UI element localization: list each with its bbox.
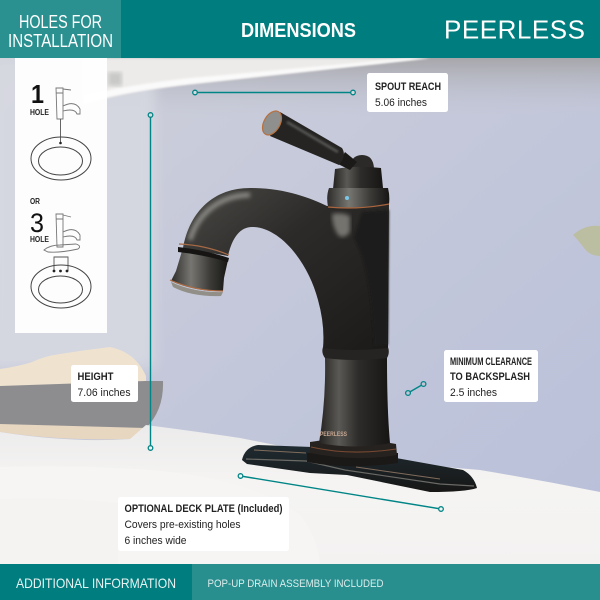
footer bar xyxy=(0,564,600,600)
icon: 3 hole count: OR xyxy=(30,197,40,206)
callout: minimum clearance xyxy=(444,350,538,402)
logo: Peerless: PEERLESS xyxy=(444,14,585,44)
header bar xyxy=(0,0,600,58)
icon: 1 hole faucet xyxy=(56,88,80,142)
callout: minimum clearance: 2.5 inches xyxy=(450,387,497,399)
icon: 3 hole sink xyxy=(31,265,91,308)
background: soap dish xyxy=(0,347,163,439)
background: counter top xyxy=(0,425,600,570)
icon: 3 hole count xyxy=(30,197,50,244)
faucet: spout and upper body xyxy=(183,188,389,350)
footer: additional information tab: ADDITIONAL INFORMATION xyxy=(16,575,176,591)
background: shelf trim xyxy=(82,58,430,104)
header: holes for installation tab: INSTALLATION xyxy=(8,31,113,51)
faucet: mid ring xyxy=(322,344,389,360)
faucet: base collar xyxy=(307,439,398,466)
callout: optional deck plate: Covers pre-existing holes xyxy=(124,519,241,531)
header: title: DIMENSIONS xyxy=(241,20,356,42)
callout: spout reach xyxy=(367,73,448,112)
icon: 1 hole count: 1 xyxy=(31,79,44,109)
dimension line: height xyxy=(148,113,153,450)
footer: additional information tab xyxy=(0,564,192,600)
icon: 3 hole faucet xyxy=(44,214,80,271)
callout: optional deck plate: OPTIONAL DECK PLATE (Included) xyxy=(124,503,283,515)
callout: height xyxy=(71,365,138,402)
dimension line: backsplash clearance xyxy=(406,382,426,395)
faucet: deck plate xyxy=(242,445,477,492)
callout: optional deck plate xyxy=(118,497,289,551)
callout: height: HEIGHT xyxy=(78,371,114,383)
faucet: handle xyxy=(259,108,357,170)
faucet: upper body highlight xyxy=(332,213,350,237)
callout: minimum clearance: MINIMUM CLEARANCE xyxy=(450,356,532,368)
callout: height: 7.06 inches xyxy=(78,387,131,399)
icon: 3 hole count: HOLE xyxy=(30,235,50,244)
icon: 3 hole count: 3 xyxy=(30,208,44,238)
background: sink edge xyxy=(0,466,320,570)
icon: 1 hole sink xyxy=(31,137,91,180)
callout: optional deck plate: 6 inches wide xyxy=(124,535,186,547)
callout: spout reach: SPOUT REACH xyxy=(375,81,441,93)
background: leaf xyxy=(573,226,600,256)
callout: minimum clearance: TO BACKSPLASH xyxy=(450,371,530,383)
faucet xyxy=(170,108,477,492)
callout: spout reach: 5.06 inches xyxy=(375,97,427,109)
header: holes for installation tab xyxy=(0,0,121,58)
header: holes for installation tab: HOLES FOR xyxy=(19,12,102,32)
icon: 1 hole count: HOLE xyxy=(30,108,50,117)
dimension line: deck plate width xyxy=(238,474,443,511)
faucet: brand mark: PEERLESS xyxy=(320,432,347,438)
panel: holes for installation xyxy=(15,58,107,333)
background: wall shadow on left xyxy=(0,58,155,368)
faucet: lower body xyxy=(319,358,390,446)
faucet: cartridge cap xyxy=(327,155,389,208)
footer: additional information text: POP-UP DRAIN ASSEMBLY INCLUDED xyxy=(208,578,384,590)
faucet: spout nozzle xyxy=(170,244,229,296)
dimension line: spout reach xyxy=(193,90,355,95)
icon: 1 hole count xyxy=(30,79,50,117)
faucet: spout highlight xyxy=(190,195,250,240)
